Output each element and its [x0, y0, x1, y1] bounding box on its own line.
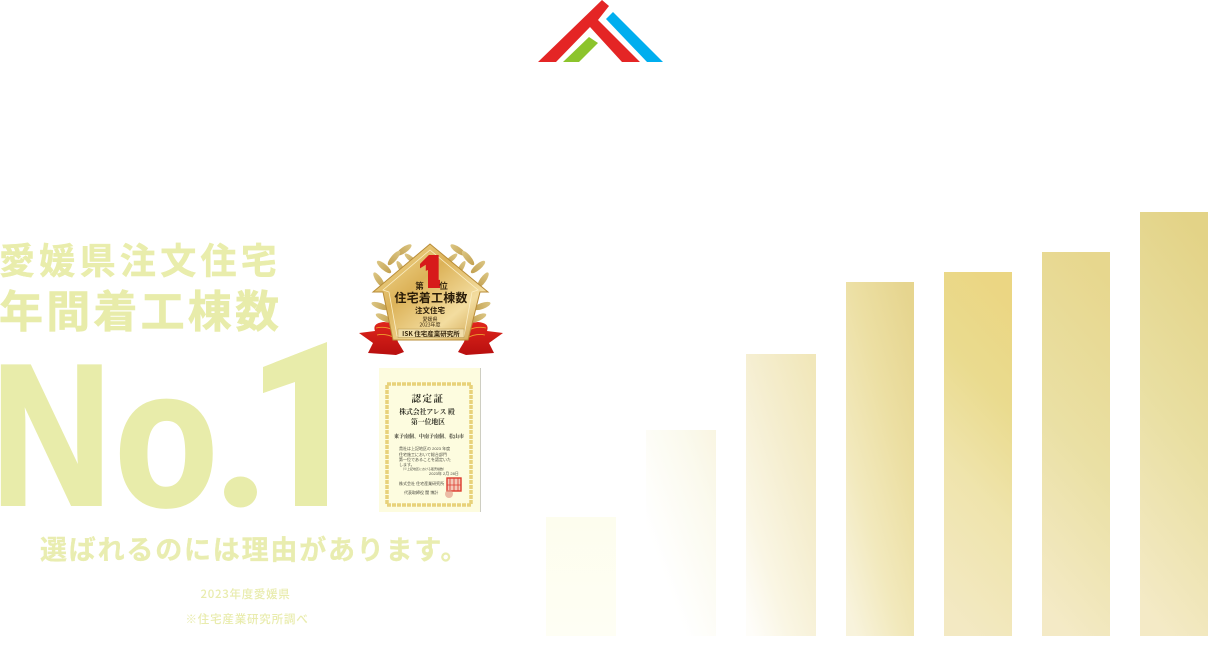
period dot	[224, 469, 257, 513]
certificate body text	[399, 445, 459, 495]
bar 4	[846, 282, 914, 636]
badge subtitle: 注文住宅	[415, 305, 445, 316]
certificate rank: 第一位地区	[411, 416, 445, 426]
bar 7	[1140, 212, 1208, 636]
badge rank label right: 位	[439, 280, 448, 292]
certificate company: 株式会社アレス 殿	[399, 406, 455, 416]
note: source: ※住宅産業研究所調べ	[186, 611, 308, 627]
certificate body text: します。	[399, 462, 415, 467]
logo red roof	[538, 0, 640, 62]
certificate paper	[379, 368, 480, 512]
note: year and prefecture: 2023年度愛媛県	[200, 586, 291, 602]
certificate body text: 2023年 2月 28日	[429, 470, 459, 476]
bar 5	[944, 272, 1012, 636]
certificate area: 東予南個、中南予南個、松山市	[394, 433, 464, 440]
period dot: .	[232, 469, 243, 513]
red ribbon	[359, 322, 503, 355]
logo: roof mark	[538, 0, 663, 62]
badge footer: ISK 住宅産業研究所	[402, 328, 460, 338]
heading: prefecture custom homes: 愛媛県注文住宅	[0, 232, 281, 284]
bar 6	[1042, 252, 1110, 636]
bar 1	[546, 517, 616, 636]
bar chart	[546, 212, 1208, 636]
certificate border	[387, 384, 471, 505]
numeral one: 1	[248, 294, 368, 556]
certificate red stamp	[445, 478, 461, 498]
bar 3	[746, 354, 816, 636]
certificate body text: 第一位であることを認定いた	[399, 456, 451, 462]
laurel leaves	[371, 242, 491, 325]
certificate body text: （※上記地区における販売棟数）	[401, 466, 446, 471]
certificate body text: 住宅施工において総合部門	[399, 451, 447, 457]
logo blue segment	[606, 12, 663, 62]
tagline: 選ばれるのには理由があります。	[40, 528, 469, 568]
heading: annual construction count: 年間着工棟数	[0, 276, 282, 340]
badge rank labels: 第	[415, 280, 424, 292]
badge region: 愛媛県	[422, 316, 438, 323]
certificate body text: 株式会社 住宅産業研究所	[399, 480, 444, 486]
certificate	[379, 368, 481, 512]
badge number 1: 1	[417, 243, 445, 299]
big number: No.1: o	[115, 331, 218, 547]
certificate body text: 代表取締役 関 博計	[404, 489, 438, 495]
big number: No.1	[0, 342, 327, 509]
badge year: 2023年度	[419, 322, 441, 328]
logo green segment	[563, 37, 598, 62]
badge title: 住宅着工棟数	[394, 289, 468, 306]
award badge	[359, 242, 503, 355]
certificate body text: 貴社は上記地区の 2023 年度	[399, 445, 450, 451]
bar 2	[646, 430, 716, 636]
gold house shield	[373, 244, 488, 340]
certificate heading: 認定証	[411, 391, 445, 405]
